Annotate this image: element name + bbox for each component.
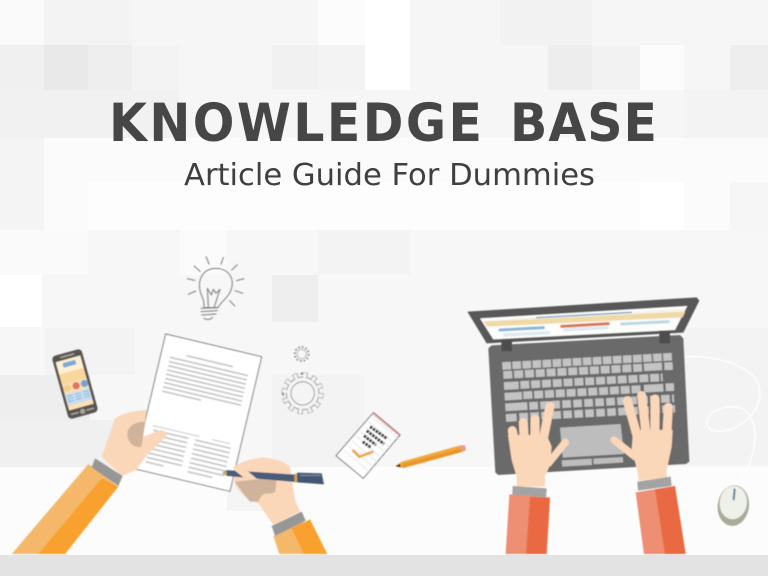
icon: pencil — [395, 445, 466, 468]
mouse cord — [685, 357, 760, 487]
left typing hand — [506, 406, 565, 554]
orange right sleeve — [273, 519, 327, 554]
laptop base — [488, 335, 689, 475]
left cuff — [512, 486, 547, 497]
keyboard — [502, 357, 675, 418]
icon: large gear — [284, 375, 321, 412]
laptop — [467, 297, 699, 475]
right scene: laptop, hands, mouse — [467, 297, 760, 554]
hinges — [501, 331, 670, 351]
document — [134, 334, 262, 491]
right hand with pen — [222, 457, 327, 554]
pen — [222, 470, 324, 484]
floor strip — [0, 555, 768, 576]
right cuff — [637, 477, 672, 491]
left hand holding document — [12, 410, 167, 554]
icon: notepad — [336, 413, 400, 478]
title: BASE — [510, 92, 657, 153]
icon: mouse — [715, 483, 752, 528]
right typing hand — [614, 396, 686, 554]
icon: smartphone — [51, 348, 99, 420]
middle scene: gears, notepad, pencil — [284, 347, 466, 478]
left red sleeve — [506, 494, 550, 554]
trackpad — [560, 424, 624, 458]
title: KNOWLEDGE — [109, 92, 482, 153]
orange left sleeve — [12, 464, 118, 554]
subtitle: Article Guide For Dummies — [184, 158, 595, 193]
left scene: phone, bulb, document and hands — [12, 257, 327, 554]
title — [109, 92, 657, 153]
right red sleeve — [636, 486, 686, 554]
icon: light bulb — [187, 257, 244, 319]
laptop lid — [467, 297, 699, 343]
icon: small gear — [295, 347, 309, 361]
